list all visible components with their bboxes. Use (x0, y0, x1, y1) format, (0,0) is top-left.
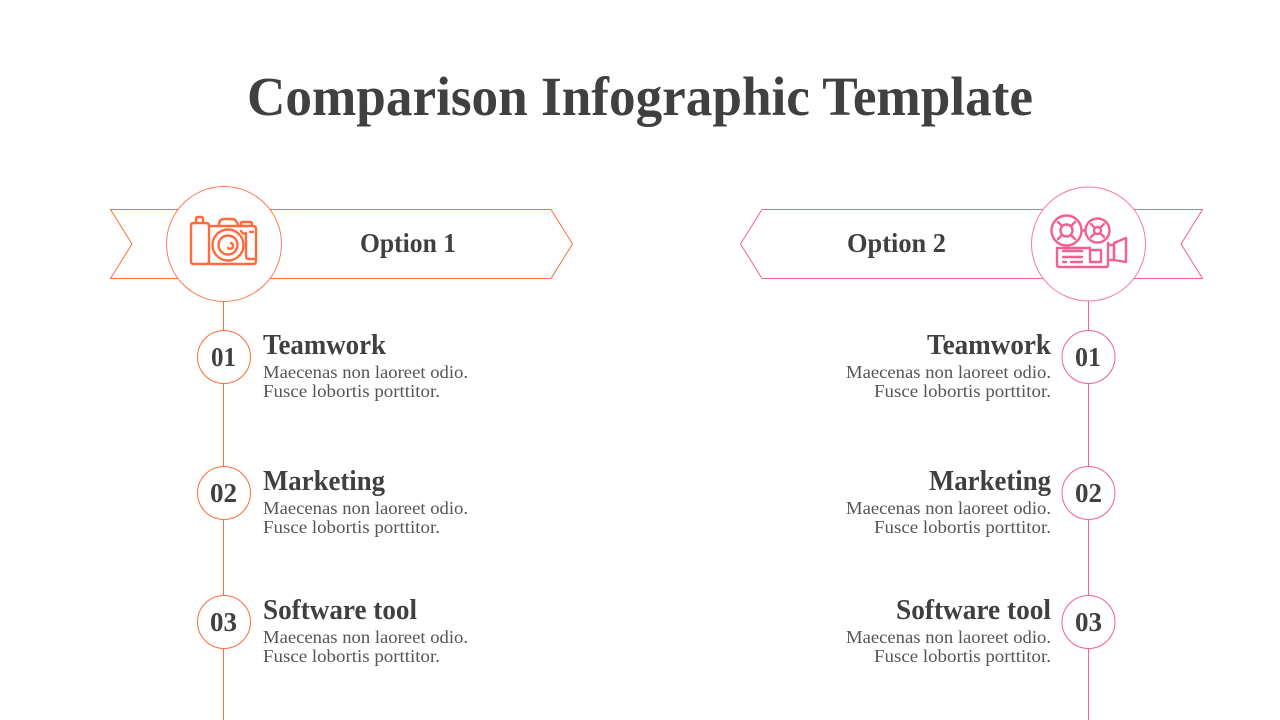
description: Maecenas non laoreet odio. (263, 627, 468, 647)
description (846, 627, 1051, 666)
item: option 2 row 3 (846, 595, 1115, 666)
description (263, 498, 468, 537)
heading: Teamwork (927, 330, 1051, 361)
ribbon label: option 2: Option 2 (847, 228, 946, 258)
description: Maecenas non laoreet odio. (846, 498, 1051, 518)
number badge: 02 (1075, 478, 1102, 508)
number badge: 01 (211, 342, 236, 372)
icon: film projector (1052, 216, 1126, 267)
description: Fusce lobortis porttitor. (263, 646, 440, 666)
description (263, 627, 468, 666)
panel: option 2 (740, 187, 1202, 720)
item: option 1 row 3 (198, 595, 468, 666)
panel: option 1 (110, 186, 572, 720)
heading: Software tool (896, 595, 1051, 626)
description: Fusce lobortis porttitor. (263, 517, 440, 537)
title: Comparison Infographic Template (247, 66, 1033, 127)
number badge: 01 (1075, 342, 1101, 372)
description: Maecenas non laoreet odio. (263, 362, 468, 382)
item: option 2 row 1 (846, 330, 1115, 401)
number badge: 03 (210, 607, 237, 637)
number badge: 02 (210, 478, 237, 508)
description: Fusce lobortis porttitor. (874, 381, 1051, 401)
description: Fusce lobortis porttitor. (874, 646, 1051, 666)
heading: Marketing (263, 466, 385, 497)
description: Maecenas non laoreet odio. (846, 627, 1051, 647)
description (846, 362, 1051, 401)
icon: camera (191, 217, 256, 264)
item: option 1 row 2 (198, 466, 468, 537)
number badge (198, 466, 250, 520)
ribbon: option 1 (110, 210, 572, 278)
timeline line: option 1 (222, 300, 224, 720)
number badge: 03 (1075, 607, 1102, 637)
number badge (198, 596, 250, 648)
number badge (1062, 466, 1115, 520)
timeline line: option 2 (1088, 300, 1090, 720)
description: Maecenas non laoreet odio. (846, 362, 1051, 382)
number badge (198, 330, 250, 384)
description: Maecenas non laoreet odio. (263, 498, 468, 518)
ribbon: option 2 (740, 210, 1202, 278)
heading: Teamwork (263, 330, 386, 361)
item: option 1 row 1 (198, 330, 468, 401)
ribbon label: option 1: Option 1 (360, 228, 456, 258)
item: option 2 row 2 (846, 466, 1115, 537)
description: Fusce lobortis porttitor. (874, 517, 1051, 537)
description (846, 498, 1051, 537)
heading: Software tool (263, 595, 417, 626)
description (263, 362, 468, 401)
icon circle: option 1 (166, 186, 282, 302)
icon circle: option 2 (1032, 187, 1146, 301)
number badge (1062, 596, 1115, 648)
description: Fusce lobortis porttitor. (263, 381, 440, 401)
number badge (1062, 330, 1115, 384)
heading: Marketing (929, 466, 1051, 497)
